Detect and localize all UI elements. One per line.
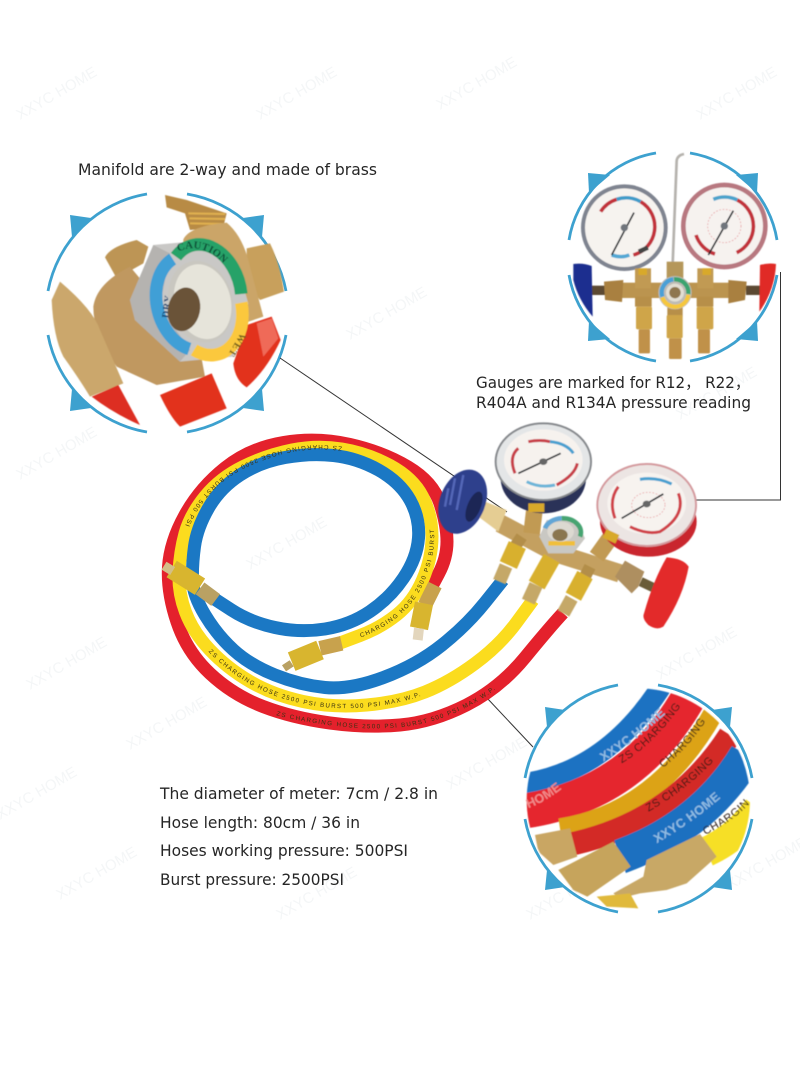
ring labels: CAUTION xyxy=(176,240,228,263)
watermark pattern: XXYC HOME xyxy=(244,514,330,573)
watermark on hoses: XXYC HOME xyxy=(652,791,721,844)
watermark pattern: XXYC HOME xyxy=(24,634,110,693)
brass manifold body photo: DRY xyxy=(160,294,175,319)
watermark pattern: XXYC HOME xyxy=(124,694,210,753)
panel: hoses close-up xyxy=(524,684,754,914)
circular frame: gauges xyxy=(569,153,777,361)
hose bundle photo xyxy=(525,688,751,910)
caption: gauges note xyxy=(476,373,751,412)
watermark pattern: XXYC HOME xyxy=(694,64,780,123)
caption: gauges note: R404A and R134A pressure reading xyxy=(476,393,751,412)
gauge neck fittings xyxy=(528,503,619,544)
watermark pattern: XXYC HOME xyxy=(434,54,520,113)
manifold body xyxy=(500,505,620,573)
hose lettering: CHARGING xyxy=(659,718,705,767)
watermark on hoses xyxy=(525,708,721,844)
hex nut xyxy=(130,242,248,362)
hose set xyxy=(162,434,568,733)
panel: gauges close-up xyxy=(569,153,777,361)
gauge set photo xyxy=(573,154,776,359)
watermark pattern: XXYC HOME xyxy=(14,64,100,123)
blue hose xyxy=(192,455,503,688)
red knob xyxy=(615,557,689,628)
watermark on hoses: HOME xyxy=(525,782,562,808)
brass fittings xyxy=(535,828,717,908)
circular frame: hoses xyxy=(525,685,752,912)
hose print: ZS CHARGING HOSE 2500 PSI BURST 500 PSI MAX W.P. xyxy=(208,648,420,708)
watermark pattern: XXYC HOME xyxy=(344,284,430,343)
brass manifold body photo: WET xyxy=(225,331,248,359)
glass window xyxy=(159,253,242,350)
hose print: ZS CHARGING HOSE 2500 PSI BURST 500 PSI xyxy=(186,445,342,526)
main gauge assembly xyxy=(429,423,697,628)
hose lettering: CHARGING xyxy=(702,798,750,834)
brass manifold body photo xyxy=(51,194,284,428)
leader line: gauges xyxy=(693,272,780,500)
specifications text block: The diameter of meter: 7cm / 2.8 in xyxy=(159,784,438,803)
blue knob xyxy=(429,462,507,541)
watermark pattern: XXYC HOME xyxy=(14,424,100,483)
hose lettering: ZS CHARGING xyxy=(645,756,713,812)
circular frame: manifold xyxy=(48,194,286,432)
leader line: manifold xyxy=(280,358,507,512)
sight glass xyxy=(539,518,585,553)
watermark pattern: XXYC HOME xyxy=(444,734,530,793)
watermark pattern: XXYC HOME xyxy=(274,864,360,923)
heading: manifold note: Manifold are 2-way and made of brass xyxy=(78,160,377,179)
hose print xyxy=(186,445,495,728)
yellow hose xyxy=(179,447,533,706)
red hose xyxy=(168,440,563,726)
specifications text block: Burst pressure: 2500PSI xyxy=(160,870,344,889)
watermark pattern: XXYC HOME xyxy=(254,64,340,123)
specifications text block: Hoses working pressure: 500PSI xyxy=(160,841,408,860)
hose end fittings xyxy=(164,566,435,668)
caption: gauges note: Gauges are marked for R12， R22， xyxy=(476,373,750,392)
left gauge xyxy=(496,423,591,513)
right gauge xyxy=(681,183,768,269)
manifold bar and knobs xyxy=(573,262,776,317)
red caps xyxy=(92,317,281,427)
watermark pattern: XXYC HOME xyxy=(674,364,760,423)
sight glass xyxy=(658,276,692,309)
watermark pattern: XXYC HOME xyxy=(54,844,140,903)
left gauge xyxy=(581,184,668,271)
hose lettering: ZS CHARGING xyxy=(618,702,680,764)
leader line: hoses xyxy=(487,698,533,747)
watermark pattern: XXYC HOME xyxy=(524,864,610,923)
specifications text block xyxy=(159,784,438,889)
sight glass ring xyxy=(156,244,242,355)
hose lettering xyxy=(618,702,750,834)
watermark on hoses: XXYC HOME xyxy=(598,708,666,762)
specifications text block: Hose length: 80cm / 36 in xyxy=(160,813,360,832)
valve fittings xyxy=(636,307,713,359)
right gauge xyxy=(597,464,697,557)
watermark pattern: XXYC HOME xyxy=(654,624,740,683)
hose port fittings xyxy=(499,537,590,613)
hose print: CHARGING HOSE 2500 PSI BURST xyxy=(360,530,434,637)
panel: manifold close-up xyxy=(46,192,288,434)
hose print: ZS CHARGING HOSE 2500 PSI BURST 500 PSI MAX W.P. xyxy=(276,688,495,728)
